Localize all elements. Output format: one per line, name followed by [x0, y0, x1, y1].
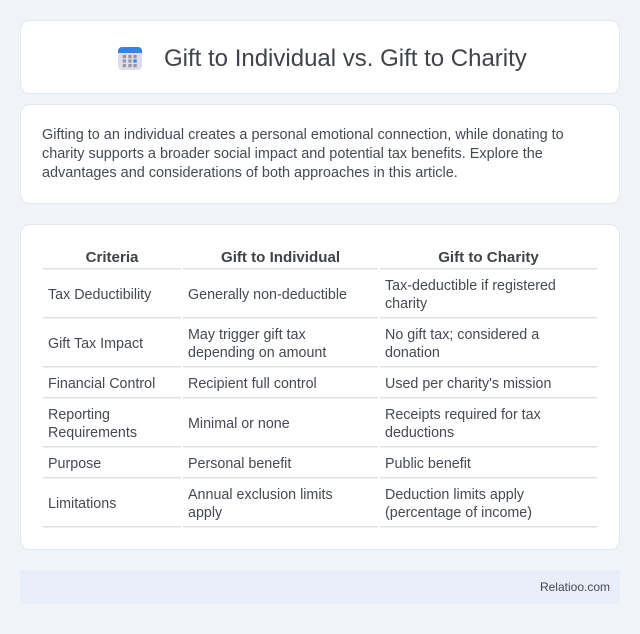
comparison table: deductions [385, 425, 454, 441]
comparison table: apply [188, 505, 222, 521]
comparison table: May trigger gift tax [188, 327, 306, 343]
intro text panel [20, 104, 620, 204]
comparison table: Recipient full control [188, 376, 317, 392]
footer credit: Relatioo.com [540, 580, 610, 594]
comparison table: Tax-deductible if registered [385, 278, 556, 294]
title: Gift to Individual vs. Gift to Charity [164, 45, 527, 72]
comparison table: (percentage of income) [385, 505, 532, 521]
icon: calendar [118, 47, 142, 70]
intro paragraph [42, 127, 564, 181]
comparison table: charity [385, 296, 427, 312]
row: financial control: Financial Control [48, 376, 155, 392]
header panel [20, 20, 620, 94]
comparison table: No gift tax; considered a [385, 327, 539, 343]
row: reporting requirements: Reporting [48, 407, 110, 423]
intro paragraph: charity supports a broader social impact and potential tax benefits. Explore the [42, 146, 543, 162]
comparison table: Annual exclusion limits [188, 487, 333, 503]
comparison table: Generally non-deductible [188, 287, 347, 303]
row: reporting requirements: Requirements [48, 425, 137, 441]
row: reporting requirements [48, 407, 137, 441]
comparison table: Minimal or none [188, 416, 290, 432]
comparison table: donation [385, 345, 440, 361]
comparison table: Receipts required for tax [385, 407, 541, 423]
row: limitations: Limitations [48, 496, 116, 512]
comparison table: Used per charity's mission [385, 376, 551, 392]
column heading: gift to individual: Gift to Individual [221, 249, 340, 266]
intro paragraph: advantages and considerations of both approaches in this article. [42, 165, 458, 181]
column heading: criteria: Criteria [86, 249, 138, 266]
comparison table panel [20, 224, 620, 550]
row: tax deductibility: Tax Deductibility [48, 287, 151, 303]
intro paragraph: Gifting to an individual creates a personal emotional connection, while donating to [42, 127, 564, 143]
comparison table: Public benefit [385, 456, 471, 472]
row: purpose: Purpose [48, 456, 101, 472]
comparison table: Personal benefit [188, 456, 291, 472]
row: gift tax impact: Gift Tax Impact [48, 336, 143, 352]
column heading: gift to charity: Gift to Charity [438, 249, 539, 266]
comparison table: depending on amount [188, 345, 326, 361]
comparison table: Deduction limits apply [385, 487, 524, 503]
footer bar [20, 570, 620, 604]
